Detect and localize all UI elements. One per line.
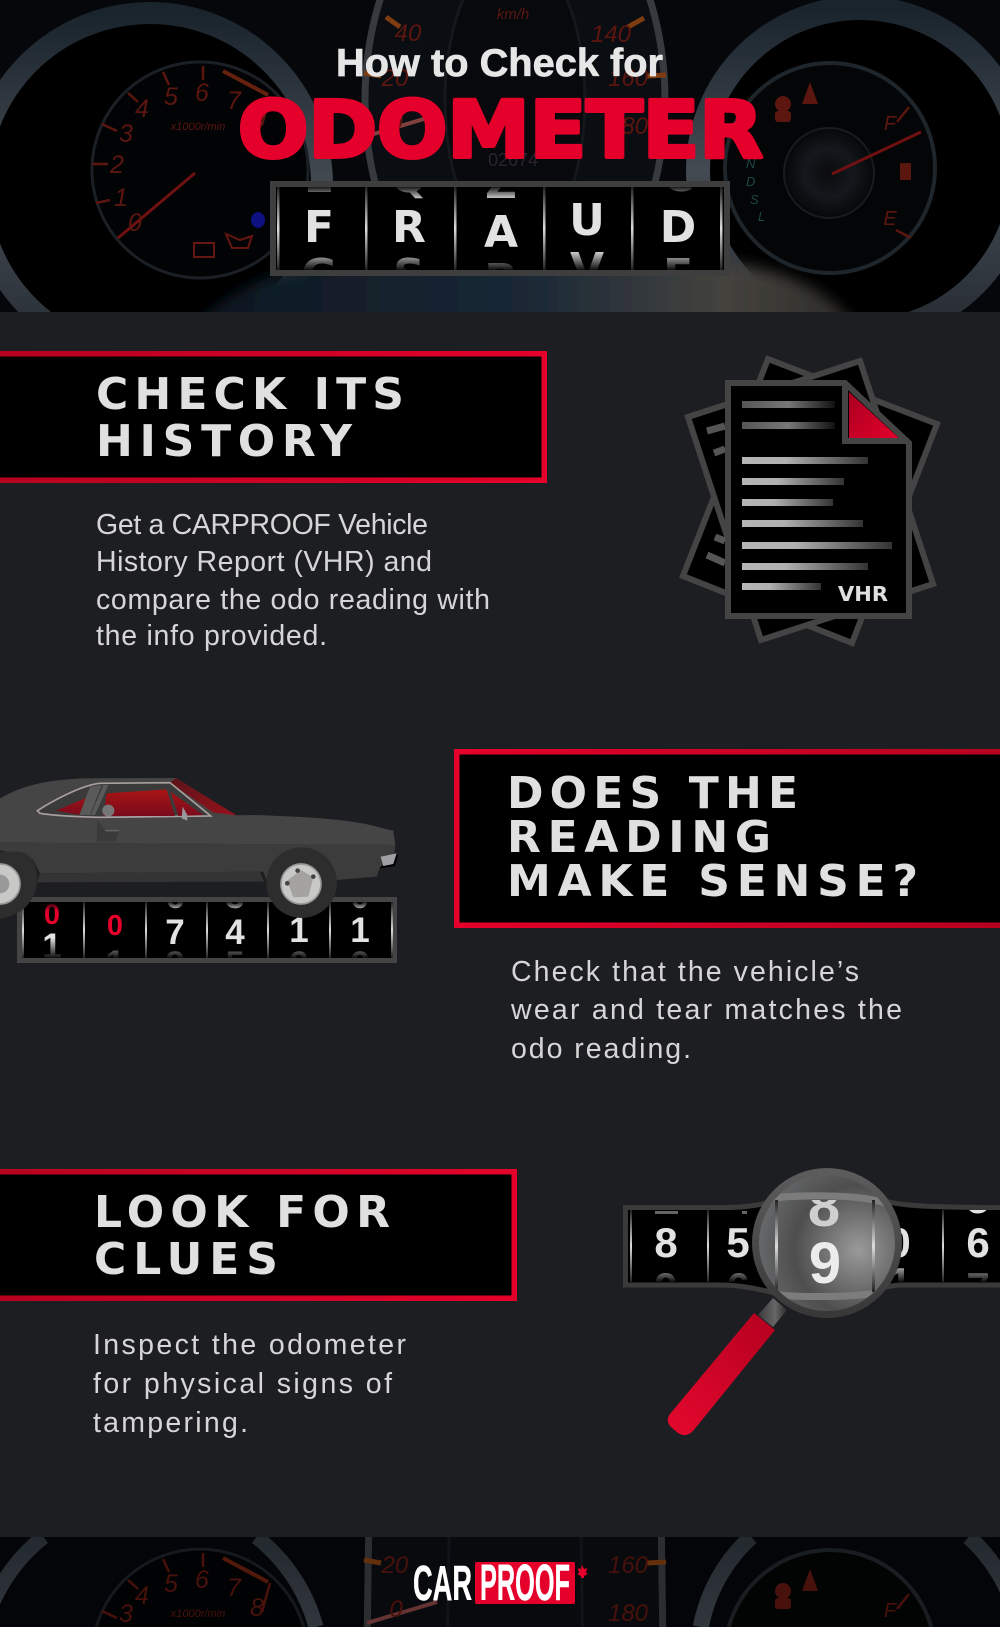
title odometer: FRAUD: C	[662, 151, 694, 202]
header: dashboard background: 7	[227, 87, 242, 115]
header: dashboard background: F	[884, 113, 898, 135]
footer: dashboard background: 160	[608, 1552, 649, 1579]
footer: dashboard background: 6	[195, 1566, 209, 1594]
header: dashboard background: 8	[250, 107, 264, 135]
heading: DOES THE	[507, 768, 798, 819]
logo: CARPROOF	[413, 1554, 588, 1611]
header: dashboard background: 40	[395, 20, 422, 47]
icon: magnifying glass	[668, 1172, 898, 1435]
header: dashboard background: 02674	[488, 150, 538, 170]
odometer with magnifier: 6	[726, 1264, 750, 1311]
footer: dashboard background: x1000r/min	[170, 1608, 225, 1620]
header: dashboard background: 5	[164, 83, 178, 111]
body text	[96, 509, 490, 652]
heading box	[0, 354, 544, 480]
car illustration	[0, 778, 398, 918]
header: dashboard background: 2	[109, 151, 124, 179]
odometer with magnifier: 7	[966, 1264, 990, 1311]
icon: magnifying glass: 8	[808, 1174, 840, 1239]
header: dashboard background: 0	[128, 209, 142, 237]
logo: CARPROOF: PROOF	[480, 1554, 570, 1611]
odometer with magnifier: 5	[726, 1219, 750, 1266]
header: dashboard background: x1000r/min	[170, 121, 225, 133]
panel: check its history	[0, 354, 544, 652]
heading box	[457, 752, 1000, 925]
odometer under car: 4	[225, 913, 245, 952]
header: dashboard background: 160	[608, 65, 649, 92]
odometer with magnifier: 0	[887, 1219, 911, 1266]
footer: dashboard background: 4	[135, 1582, 149, 1610]
header: dashboard background: S	[750, 192, 759, 207]
header: dashboard background: km/h	[497, 6, 529, 23]
title odometer: FRAUD: D	[660, 202, 696, 253]
footer: dashboard background: 7	[227, 1574, 242, 1602]
odometer with magnifier: 9	[654, 1264, 678, 1311]
title odometer: FRAUD: Z	[485, 158, 517, 209]
footer: dashboard background: 0	[389, 1596, 403, 1623]
title odometer: FRAUD: U	[569, 195, 605, 246]
heading: CHECK ITS	[96, 369, 404, 420]
heading: READING	[507, 812, 771, 863]
odometer under car: 1	[350, 911, 370, 950]
heading: LOOK FOR	[94, 1187, 390, 1238]
heading	[507, 768, 918, 907]
footer: dashboard background	[0, 1537, 1000, 1627]
odometer under car: 1	[105, 944, 125, 983]
odometer with magnifier: 1	[888, 1259, 912, 1306]
title odometer: FRAUD: V	[570, 244, 604, 295]
header: dashboard background: 6	[195, 79, 209, 107]
icon label: VHR: VHR	[838, 582, 888, 606]
footer: dashboard background: 20	[381, 1552, 409, 1579]
odometer with magnifier: 6	[966, 1219, 990, 1266]
panel: does the reading make sense	[457, 752, 1000, 1065]
heading: MAKE SENSE?	[507, 856, 918, 907]
body text	[93, 1329, 406, 1439]
header: dashboard background: L	[758, 209, 765, 224]
body text: the info provided.	[96, 620, 327, 652]
heading: CLUES	[94, 1234, 278, 1285]
title odometer: FRAUD: S	[393, 250, 425, 301]
header: dashboard background: E	[883, 208, 897, 230]
header: dashboard background	[0, 0, 1000, 312]
title odometer: FRAUD: E	[663, 250, 693, 301]
logo: CARPROOF: CAR	[413, 1557, 472, 1611]
title odometer: FRAUD: F	[304, 202, 334, 253]
odometer under car: 1	[289, 911, 309, 950]
heading	[94, 1187, 390, 1285]
header: dashboard background: D	[746, 174, 755, 189]
body text: for physical signs of	[93, 1368, 392, 1400]
odometer under car: 0	[351, 878, 369, 916]
odometer under car: 5	[226, 945, 244, 983]
footer: dashboard background: 5	[164, 1570, 178, 1598]
heading box	[0, 1172, 514, 1298]
odometer with magnifier: 8	[654, 1219, 678, 1266]
body text: compare the odo reading with	[96, 584, 490, 616]
body text: wear and tear matches the	[510, 994, 902, 1026]
odometer under car: 6	[166, 878, 184, 916]
header: dashboard background: N	[746, 156, 756, 171]
title word: ODOMETER: ODOMETER	[238, 86, 763, 176]
odometer under car: 7	[165, 913, 185, 952]
title line: How to Check for: How to Check for	[336, 42, 663, 85]
body text: odo reading.	[511, 1033, 691, 1065]
title odometer: FRAUD: Q	[390, 152, 428, 203]
title odometer: FRAUD: G	[301, 250, 337, 301]
odometer with magnifier	[626, 1172, 1000, 1435]
body text: Get a CARPROOF Vehicle	[96, 509, 428, 541]
body text: History Report (VHR) and	[96, 546, 432, 578]
header: dashboard background: 0	[389, 109, 403, 136]
odometer under car: 3	[226, 878, 244, 916]
title odometer: FRAUD: A	[484, 207, 518, 258]
body text: tampering.	[93, 1407, 248, 1439]
title odometer: FRAUD	[270, 181, 730, 276]
body text: Check that the vehicle’s	[511, 956, 859, 988]
title odometer: FRAUD: E	[304, 152, 334, 203]
footer: dashboard background: 8	[250, 1594, 264, 1622]
header: dashboard background: 20	[381, 65, 409, 92]
odometer under car: 8	[166, 945, 184, 983]
odometer under car: 0	[290, 878, 308, 916]
odometer with magnifier: 5	[966, 1175, 990, 1222]
odometer under car: 2	[351, 945, 369, 983]
heading: HISTORY	[96, 416, 353, 467]
odometer under car: 1	[42, 927, 62, 966]
odometer under car: 2	[290, 945, 308, 983]
footer: dashboard background: 180	[608, 1600, 649, 1627]
header: dashboard background: 3	[119, 120, 133, 148]
icon: VHR document stack	[683, 359, 937, 643]
footer: dashboard background: F	[884, 1600, 898, 1622]
body text: Inspect the odometer	[93, 1329, 406, 1361]
header: dashboard background: 1	[114, 184, 128, 212]
title odometer: FRAUD: B	[484, 255, 518, 306]
title	[238, 42, 763, 176]
odometer under car: 0	[107, 910, 123, 942]
odometer under car	[17, 897, 397, 963]
header: dashboard background: 180	[608, 113, 649, 140]
title odometer: FRAUD: R	[392, 202, 426, 253]
header: dashboard background: 140	[591, 21, 632, 48]
heading	[96, 369, 404, 467]
odometer under car: 0	[44, 899, 60, 931]
panel: look for clues	[0, 1172, 514, 1439]
body text	[510, 956, 902, 1065]
header: dashboard background: 4	[135, 95, 149, 123]
icon: magnifying glass: 9	[809, 1231, 841, 1296]
